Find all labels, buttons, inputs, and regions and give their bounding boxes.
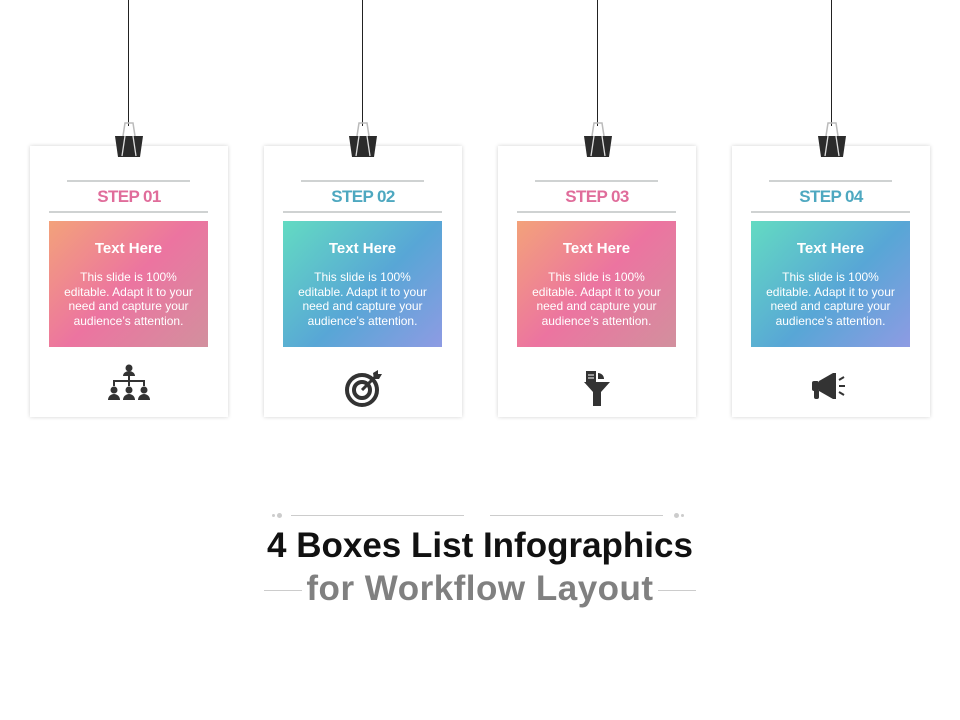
string 4 [831,0,832,126]
clip 3 [584,122,612,157]
string 2 [362,0,363,126]
text box: Text Here [329,240,396,257]
step label: STEP 01 [97,187,161,206]
text box [751,221,910,347]
text box: Text Here [95,240,162,257]
panel: step 01 [30,146,228,417]
panel: step 02 [264,146,462,417]
icon: funnel [584,371,610,406]
step label: STEP 03 [565,187,629,206]
text box: need and capture your [770,299,891,313]
text box [517,221,676,347]
text box: audience’s attention. [308,314,417,328]
text box: This slide is 100% [782,270,879,284]
text box: need and capture your [68,299,189,313]
subtitle: for Workflow Layout [306,569,654,608]
icon: target [345,370,382,407]
text box: Text Here [797,240,864,257]
text box: This slide is 100% [314,270,411,284]
text box: need and capture your [302,299,423,313]
text box: audience’s attention. [776,314,885,328]
text box: audience’s attention. [542,314,651,328]
step label: STEP 04 [799,187,863,206]
clip 4 [818,122,846,157]
text box: Text Here [563,240,630,257]
text box: need and capture your [536,299,657,313]
text box [283,221,442,347]
icon: megaphone [812,373,845,399]
string 1 [128,0,129,126]
icon: hierarchy [108,364,150,400]
clip 2 [349,122,377,157]
title: 4 Boxes List Infographics [267,526,693,565]
text box: This slide is 100% [548,270,645,284]
string 3 [597,0,598,126]
panel: step 03 [498,146,696,417]
panel: step 04 [732,146,930,417]
text box: editable. Adapt it to your [64,284,193,298]
clip 1 [115,122,143,157]
text box: editable. Adapt it to your [766,284,895,298]
text box: editable. Adapt it to your [298,284,427,298]
text box: This slide is 100% [80,270,177,284]
step label: STEP 02 [331,187,395,206]
text box: audience’s attention. [74,314,183,328]
text box: editable. Adapt it to your [532,284,661,298]
text box [49,221,208,347]
title block [264,513,696,608]
